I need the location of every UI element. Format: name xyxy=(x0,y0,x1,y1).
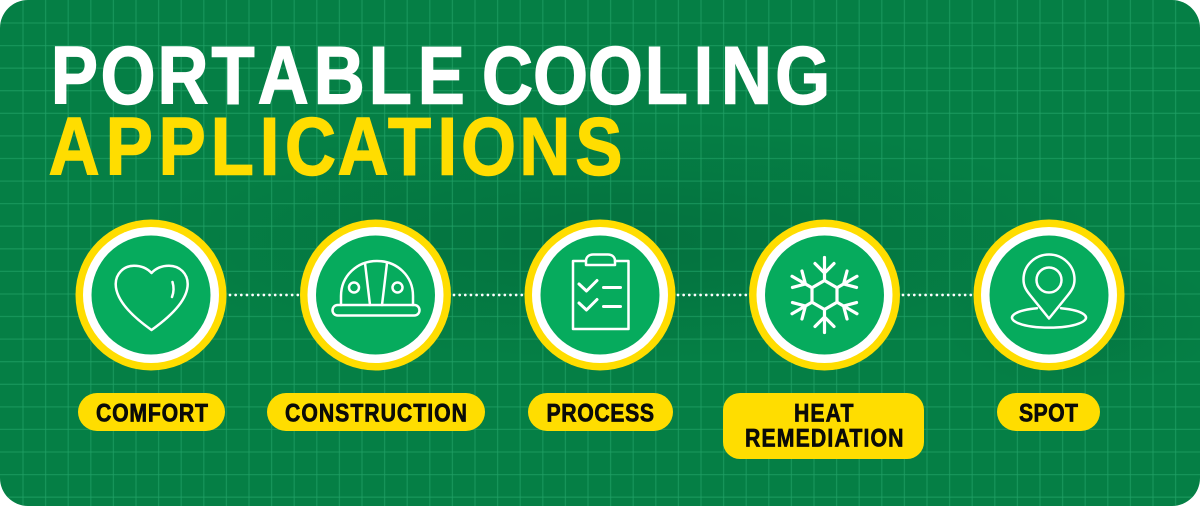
dotted connectors xyxy=(230,294,972,296)
spot badge xyxy=(974,220,1124,370)
spot label: SPOT xyxy=(1019,399,1078,427)
title line 1: PORTABLE COOLING xyxy=(51,30,830,121)
heat remediation label xyxy=(723,393,924,459)
process label xyxy=(528,393,673,431)
icon: hard hat xyxy=(332,261,420,316)
heat remediation label: REMEDIATION xyxy=(745,424,904,452)
icon: clipboard checklist xyxy=(573,254,628,329)
step: spot xyxy=(974,220,1124,431)
icon: heart xyxy=(116,266,188,330)
title line 2: APPLICATIONS xyxy=(49,101,622,192)
step: construction xyxy=(267,220,485,431)
construction label: CONSTRUCTION xyxy=(285,399,467,427)
title xyxy=(49,30,830,192)
step: comfort xyxy=(76,220,226,431)
spot label xyxy=(997,393,1100,431)
icon: location pin xyxy=(1012,254,1086,328)
heat remediation label: HEAT xyxy=(794,399,854,427)
process badge xyxy=(524,220,676,370)
heat remediation badge xyxy=(749,220,900,370)
comfort label: COMFORT xyxy=(96,399,208,427)
construction label xyxy=(267,393,485,431)
comfort label xyxy=(78,393,225,431)
construction badge xyxy=(300,220,451,370)
comfort badge xyxy=(76,220,226,370)
step: process xyxy=(524,220,676,431)
process label: PROCESS xyxy=(546,399,654,427)
step: heat remediation xyxy=(723,220,924,459)
icon: snowflake xyxy=(787,258,862,332)
